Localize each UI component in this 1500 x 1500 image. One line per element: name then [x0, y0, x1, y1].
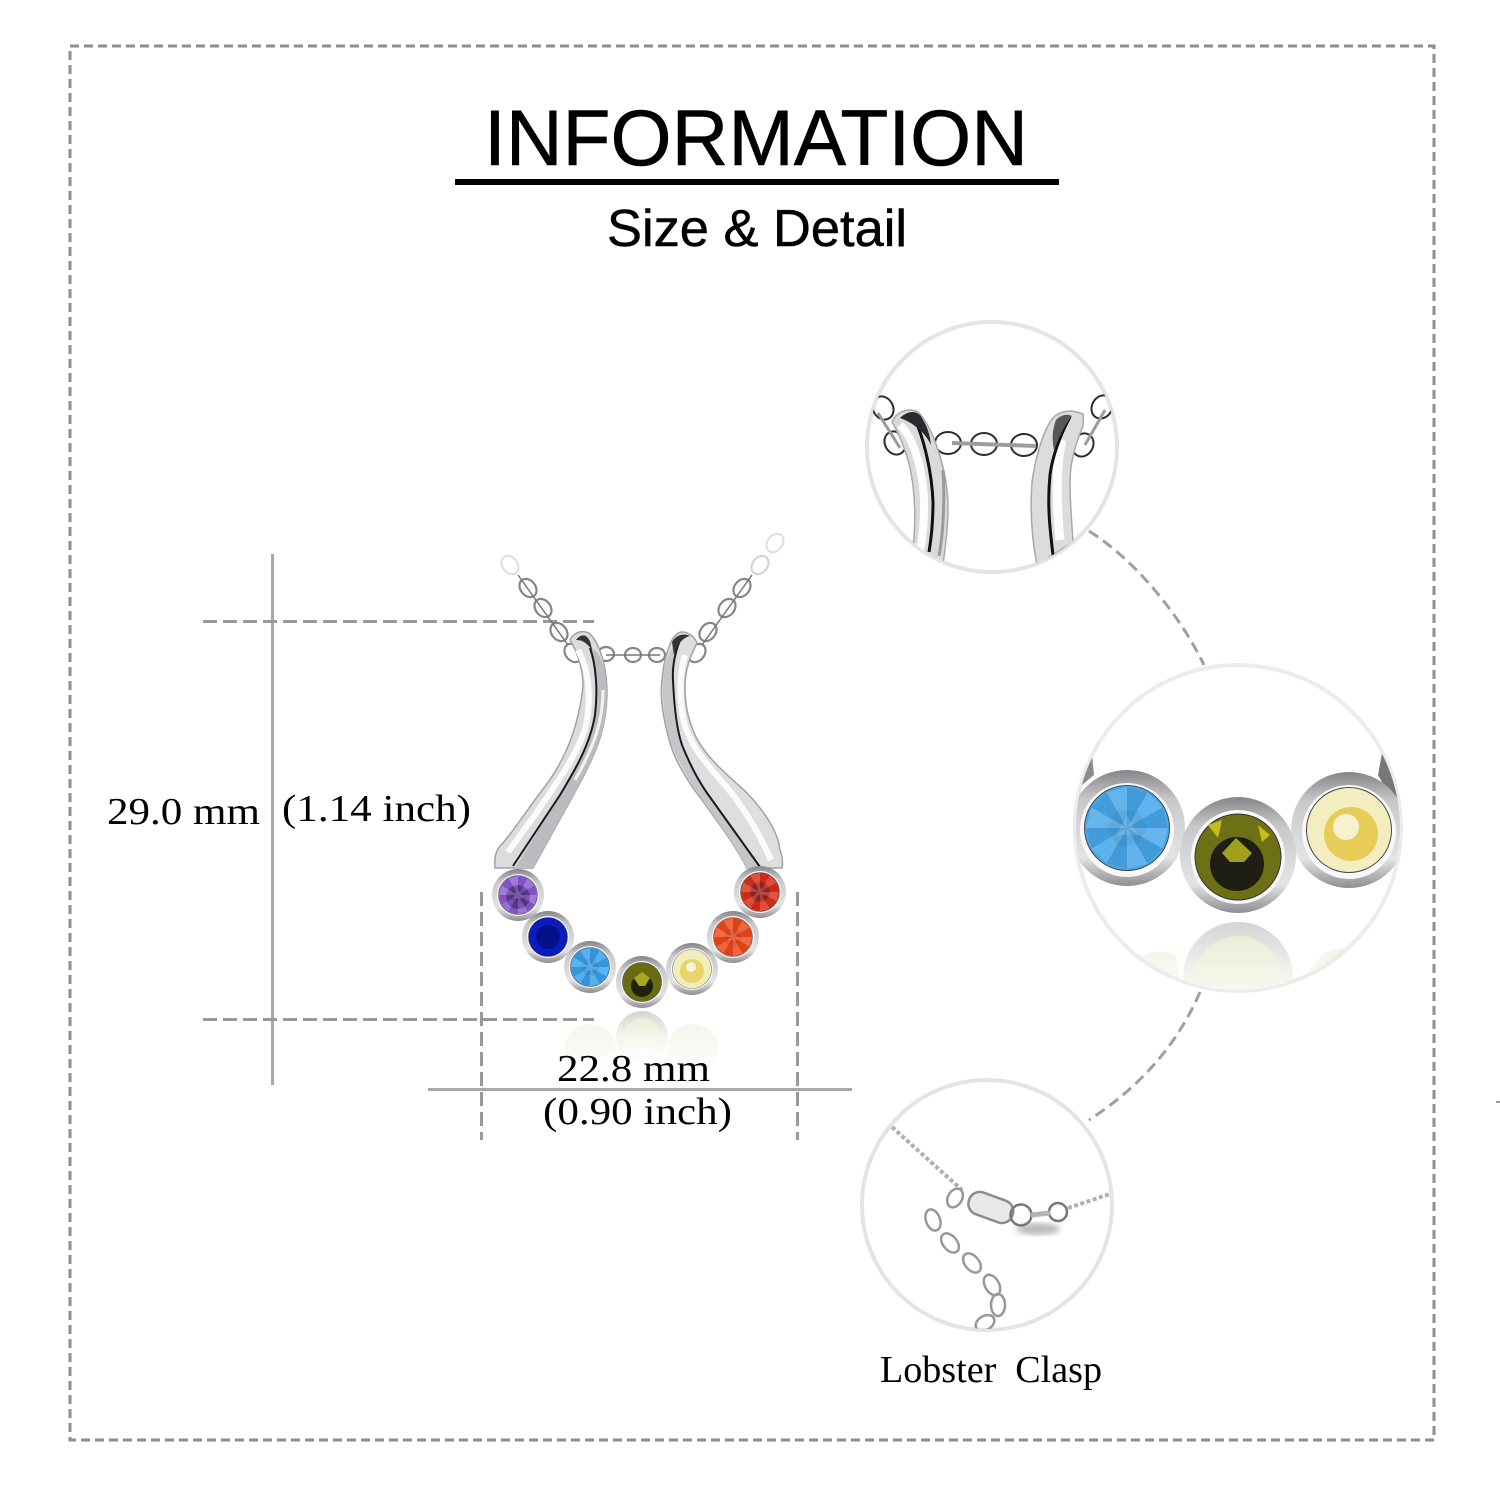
necklace chain	[498, 531, 787, 665]
connector: middle to bottom	[1089, 992, 1200, 1120]
gem: orange	[707, 911, 759, 963]
subtitle: Size & Detail	[607, 200, 907, 258]
gem: olive	[616, 956, 668, 1008]
right arm	[661, 632, 783, 868]
pale yellow stone	[1291, 772, 1407, 888]
olive stone	[1180, 797, 1296, 913]
caption: lobster clasp: Lobster Clasp	[880, 1349, 1102, 1391]
width label mm: 22.8 mm	[557, 1048, 710, 1090]
pendant illustration	[492, 531, 787, 1076]
extension chain	[923, 1186, 1005, 1334]
dimension lines: height	[203, 554, 594, 1085]
height label mm: 29.0 mm	[107, 791, 260, 833]
gem: navy	[522, 911, 574, 963]
jump rings	[1010, 1203, 1067, 1226]
gem: purple	[492, 869, 544, 921]
gem: sky blue	[564, 941, 616, 993]
connector: top to middle	[1089, 531, 1204, 665]
height label inch: (1.14 inch)	[282, 788, 471, 830]
reflection	[1142, 922, 1345, 990]
left arm	[495, 632, 607, 868]
left arm	[892, 410, 948, 565]
gem: red	[734, 866, 786, 918]
right arm	[1031, 411, 1083, 565]
gem: pale yellow	[666, 943, 718, 995]
arm stubs	[1082, 757, 1094, 786]
title: INFORMATION	[484, 93, 1028, 182]
dimension lines: width	[428, 892, 852, 1140]
clasp	[967, 1190, 1014, 1224]
detail circle: lobster clasp	[862, 1080, 1112, 1334]
stray mark at right edge	[1496, 1101, 1500, 1103]
detail circle: chain bail	[867, 322, 1117, 572]
sky blue stone	[1069, 770, 1185, 886]
fine chain	[892, 1127, 1110, 1208]
chain links	[873, 394, 1112, 458]
detail circle: gemstones	[1073, 663, 1403, 993]
width label inch: (0.90 inch)	[543, 1091, 732, 1133]
gem reflections	[564, 1011, 719, 1076]
